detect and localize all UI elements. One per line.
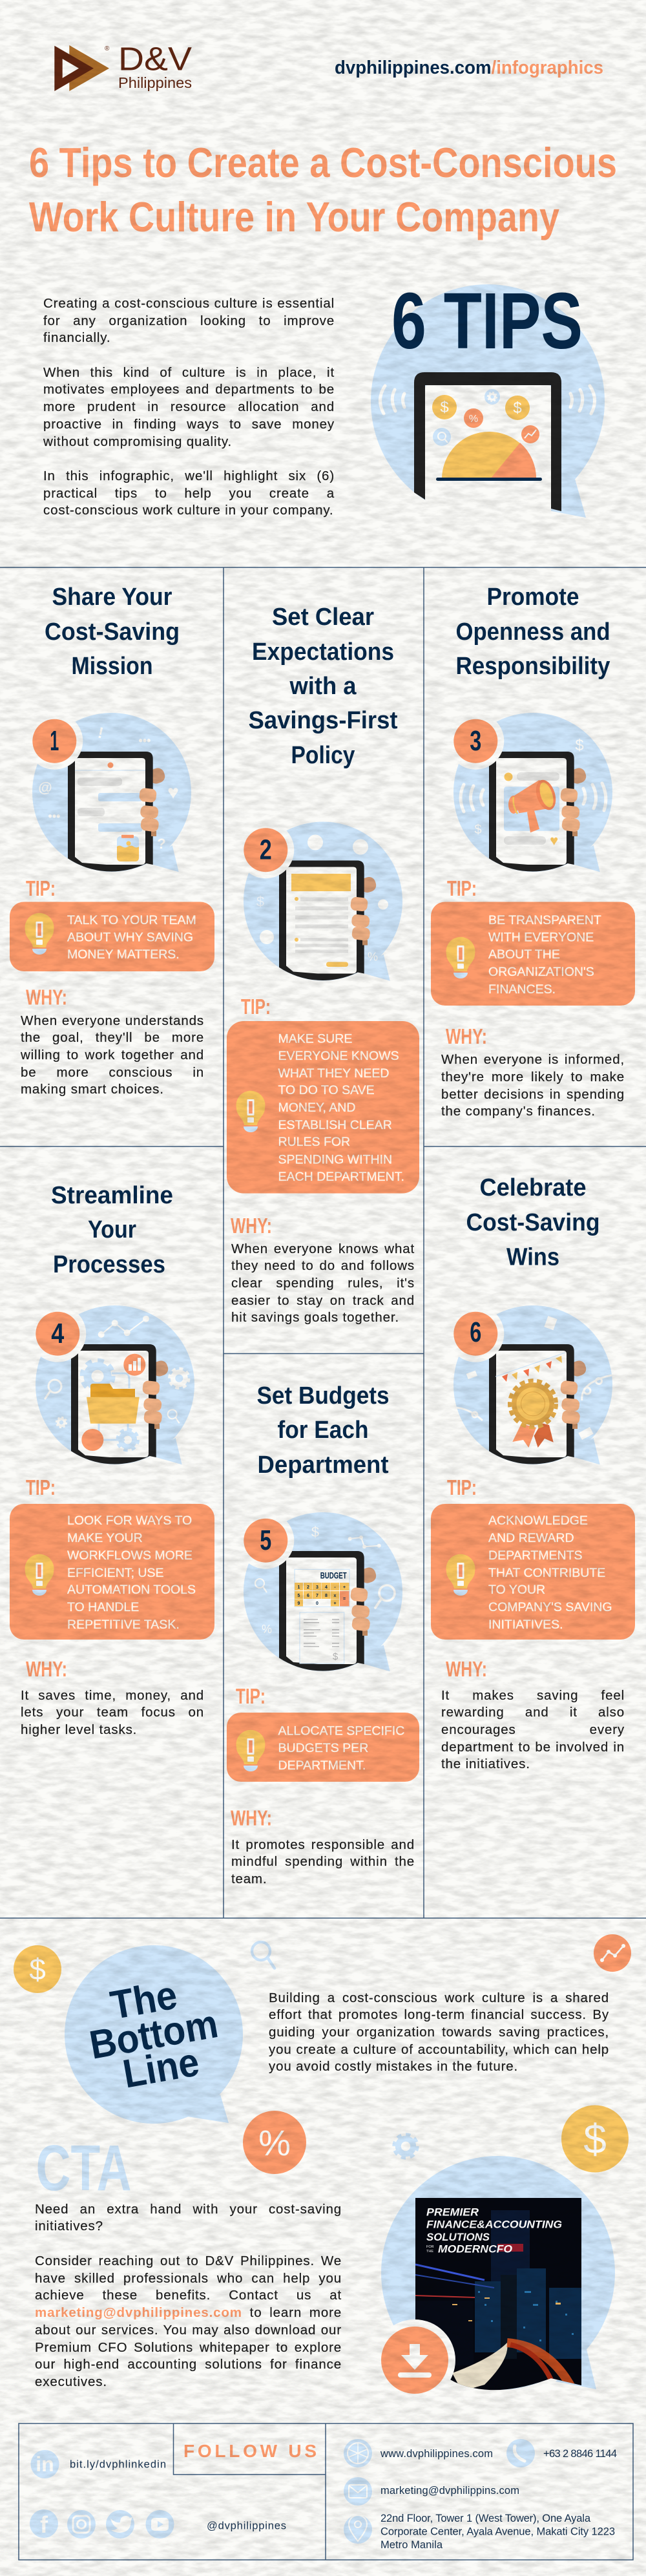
intro text: proactive in finding ways to save money — [43, 417, 335, 432]
tip box: EACH DEPARTMENT. — [278, 1170, 404, 1184]
linkedin link: in — [36, 2453, 54, 2476]
icon: percent coin — [243, 2111, 306, 2174]
tip box: ESTABLISH CLEAR — [278, 1118, 392, 1132]
whitepaper cover: FOR — [426, 2245, 434, 2249]
heading — [248, 604, 398, 769]
CTA text: have skilled professionals who can help you — [35, 2271, 342, 2286]
heading: 6 TIPS: 6 TIPS — [391, 277, 583, 366]
panel: the bottom line — [14, 1934, 631, 2124]
illustration: whitepaper in bubble — [374, 2156, 615, 2401]
illustration: budget calculator tablet: - — [334, 1585, 336, 1590]
tip box: SPENDING WITHIN — [278, 1153, 392, 1167]
CTA text: about our services. You may also download our — [35, 2323, 342, 2338]
icon: chart coin — [521, 425, 539, 443]
tip box: DEPARTMENT. — [278, 1758, 366, 1773]
why text: team. — [231, 1872, 267, 1886]
panel: tip 5 — [227, 1382, 425, 1891]
label: WHY: WHY: — [26, 985, 67, 1009]
icon: dollar coin — [561, 2106, 629, 2173]
heading: Openness and — [456, 618, 610, 646]
icon: yellow dollar coin: $ — [440, 399, 449, 416]
why text: It saves time, money, and — [21, 1688, 204, 1703]
tip box — [10, 902, 214, 971]
tip box: ABOUT THE — [488, 947, 560, 962]
why text: mindful spending within the — [231, 1854, 415, 1869]
illustration: policy document tablet: $ — [256, 893, 264, 910]
why text — [441, 1051, 635, 1123]
bottom line text: Building a cost-conscious work culture is a shared — [269, 1990, 609, 2005]
intro text: for any organization looking to improve — [43, 313, 335, 328]
label: WHY: WHY: — [446, 1657, 487, 1681]
heading — [51, 1182, 173, 1278]
tip box: ACKNOWLEDGE — [488, 1514, 588, 1528]
panel: footer — [19, 2423, 633, 2560]
social icons — [30, 2509, 174, 2539]
icon: dollar coin — [14, 1945, 61, 1993]
intro text: cost-conscious work culture in your company. — [43, 503, 333, 518]
why text: be more conscious in — [21, 1065, 204, 1080]
heading: Savings-First — [248, 707, 398, 734]
illustration: budget calculator tablet: 4 — [325, 1585, 328, 1590]
intro text: practical tips to help you create a — [43, 486, 335, 501]
why text: lets your team focus on — [21, 1705, 204, 1720]
heading: Department — [257, 1452, 389, 1479]
panel: tip 4 — [10, 1182, 214, 1742]
illustration: megaphone tablet: $ — [575, 737, 584, 754]
why text: rewarding and it also — [441, 1705, 625, 1720]
linkedin link: bit.ly/dvphlinkedin — [70, 2459, 166, 2471]
address contact: Metro Manila — [380, 2539, 443, 2551]
illustration: megaphone tablet — [447, 713, 612, 872]
why text: the initiatives. — [441, 1757, 530, 1771]
illustration: budget calculator tablet: + — [343, 1585, 346, 1590]
intro text: without compromising quality. — [43, 434, 232, 449]
label: TIP: TIP: — [26, 1475, 56, 1499]
heading: for Each — [278, 1417, 368, 1444]
intro text: financially. — [43, 330, 110, 345]
why text: department to be involved in — [441, 1740, 625, 1755]
tip box: MAKE SURE — [278, 1031, 352, 1046]
gauge — [436, 432, 542, 481]
why text — [231, 1837, 425, 1891]
heading: Celebrate — [479, 1174, 587, 1201]
tip box — [431, 902, 635, 1006]
heading: CTA: CTA — [36, 2132, 132, 2204]
logo: D&V Philippines: D&V — [118, 40, 192, 77]
illustration: budget calculator tablet: 5 — [260, 1525, 271, 1556]
whitepaper cover: THE — [426, 2250, 433, 2254]
why text — [21, 1687, 214, 1742]
website link: dvphilippines.com/infographics — [335, 58, 603, 78]
social icons: f — [40, 2511, 48, 2538]
tip box: RULES FOR — [278, 1135, 350, 1149]
heading: Promote — [487, 584, 579, 611]
why text: When everyone is informed, — [441, 1052, 625, 1067]
heading: Policy — [291, 742, 355, 769]
intro text: When this kind of culture is in place, it — [43, 365, 335, 380]
intro text: more prudent in resource allocation and — [43, 399, 335, 414]
bottom line text: effort that promotes long-term financial success. By — [269, 2007, 609, 2022]
intro text — [43, 295, 347, 528]
why text: easier to stay on track and — [231, 1293, 415, 1308]
icon: gear — [394, 2135, 417, 2158]
tip box: EFFICIENT; USE — [67, 1566, 164, 1580]
illustration: budget calculator tablet: 5 — [298, 1594, 300, 1598]
panel: tip 6 — [431, 1174, 635, 1775]
social handle: @dvphilippines — [207, 2520, 286, 2532]
tip box: EVERYONE KNOWS — [278, 1049, 399, 1063]
illustration: chat tablet: ••• — [48, 810, 60, 823]
illustration: workflow folder tablet — [29, 1305, 194, 1464]
label: WHY: WHY: — [231, 1214, 272, 1238]
icon: percent coin: % — [258, 2122, 291, 2163]
tip box: BE TRANSPARENT — [488, 913, 601, 927]
tip box: MONEY MATTERS. — [67, 947, 180, 962]
address contact — [344, 2513, 615, 2551]
email contact — [344, 2477, 519, 2506]
icon: download button — [374, 2319, 455, 2401]
illustration: budget calculator tablet: 9 — [298, 1601, 300, 1606]
tip box: WORKFLOWS MORE — [67, 1548, 193, 1563]
why text — [441, 1687, 635, 1775]
panel: tip 3 — [431, 584, 635, 1123]
heading: follow us: FOLLOW US — [183, 2441, 317, 2461]
illustration: chat tablet — [26, 713, 191, 872]
logo: D&V Philippines — [54, 40, 192, 91]
whitepaper cover: FINANCE&ACCOUNTING — [426, 2219, 562, 2231]
illustration: megaphone tablet: ♥ — [550, 832, 558, 849]
illustration: policy document tablet: 2 — [260, 834, 272, 866]
linkedin link — [31, 2450, 166, 2478]
logo: D&V Philippines: ® — [105, 45, 110, 52]
heading — [466, 1174, 599, 1271]
illustration: budget calculator tablet: 1 — [298, 1585, 300, 1590]
why text: the goal, they'll be more — [21, 1030, 204, 1045]
label: WHY: WHY: — [231, 1806, 272, 1830]
icon: yellow dollar coin right: $ — [513, 399, 522, 417]
illustration: chat tablet: ••• — [139, 734, 151, 747]
tip box: THAT CONTRIBUTE — [488, 1566, 605, 1580]
illustration: budget calculator tablet: = — [343, 1597, 346, 1601]
label: TIP: TIP: — [447, 1475, 477, 1499]
icon: dollar coin: $ — [29, 1952, 46, 1986]
tip box: ABOUT WHY SAVING — [67, 931, 193, 945]
website contact: www.dvphilippines.com — [380, 2448, 493, 2460]
why text — [21, 1013, 214, 1101]
heading: Wins — [506, 1243, 559, 1271]
bottom line text: you create a culture of accountability, which can help — [269, 2042, 609, 2057]
icon: percent coin — [464, 408, 483, 428]
whitepaper cover — [415, 2198, 581, 2392]
tip box: REPETITIVE TASK. — [67, 1618, 180, 1632]
illustration: budget calculator tablet: % — [262, 1623, 272, 1636]
tip box: ORGANIZATION'S — [488, 965, 594, 979]
illustration: budget calculator tablet: $ — [311, 1524, 319, 1540]
illustration: megaphone tablet: 3 — [470, 725, 481, 757]
why text: making smart choices. — [21, 1082, 164, 1097]
bubble: the bottom line heading: Line — [120, 2040, 202, 2097]
illustration: chat tablet: ♥ — [167, 782, 179, 803]
illustration: workflow folder tablet: 4 — [51, 1318, 65, 1349]
panel: tip 2 — [227, 604, 425, 1329]
why text: willing to work together and — [21, 1048, 204, 1062]
icon: yellow dollar coin right — [505, 396, 530, 420]
heading: Mission — [71, 653, 152, 680]
CTA text: achieve these benefits. Contact us at — [35, 2288, 342, 2303]
tip box: TALK TO YOUR TEAM — [67, 913, 196, 927]
tip box — [227, 1021, 419, 1193]
illustration: chat tablet: ! — [96, 724, 105, 743]
heading: Streamline — [51, 1182, 173, 1209]
illustration: budget calculator tablet: 0 — [316, 1601, 318, 1606]
why text: clear spending rules, it's — [231, 1276, 415, 1291]
phone contact — [506, 2439, 617, 2467]
heading: Your — [88, 1216, 136, 1243]
illustration: budget calculator tablet: $ — [333, 1651, 339, 1662]
why text — [231, 1241, 425, 1329]
CTA text: Consider reaching out to D&V Philippines. We — [35, 2254, 342, 2268]
why text: It makes saving feel — [441, 1688, 625, 1703]
illustration: chat tablet: 1 — [50, 725, 59, 757]
whitepaper cover: MODERNCFO — [438, 2244, 512, 2255]
heading: Responsibility — [456, 653, 610, 680]
icon: blue gear — [484, 389, 500, 405]
address contact: 22nd Floor, Tower 1 (West Tower), One Ayala — [380, 2513, 591, 2524]
illustration: budget calculator tablet: + — [333, 1601, 337, 1606]
bottom line text — [269, 1990, 618, 2080]
heading: Set Budgets — [257, 1382, 389, 1409]
tip box: BUDGETS PER — [278, 1741, 368, 1755]
tip box: MAKE YOUR — [67, 1531, 143, 1545]
intro text: In this infographic, we'll highlight six (6) — [43, 469, 335, 483]
why text: better decisions in spending — [441, 1087, 625, 1102]
icon: percent coin: % — [469, 414, 478, 425]
CTA text: Premium CFO Solutions whitepaper to explore — [35, 2339, 342, 2355]
tip box — [431, 1504, 635, 1640]
illustration: award ribbon tablet: 6 — [470, 1316, 481, 1348]
bubble: the bottom line heading: Bottom — [87, 2001, 222, 2068]
whitepaper cover: PREMIER — [426, 2207, 479, 2219]
tip box: FINANCES. — [488, 982, 556, 997]
heading: Cost-Saving — [45, 618, 180, 646]
bubble: the bottom line heading: The — [107, 1972, 180, 2028]
illustration: policy document tablet — [237, 821, 402, 981]
tip box: WITH EVERYONE — [488, 931, 594, 945]
CTA text: our high-end accounting solutions for finance — [35, 2357, 342, 2372]
label: TIP: TIP: — [26, 876, 56, 900]
tip box: AND REWARD — [488, 1531, 574, 1545]
label: TIP: TIP: — [447, 876, 477, 900]
website contact — [344, 2439, 493, 2467]
tip box: COMPANY'S SAVING — [488, 1600, 612, 1614]
logo: D&V Philippines: Philippines — [118, 74, 192, 91]
why text: higher level tasks. — [21, 1722, 137, 1737]
tip box: TO HANDLE — [67, 1600, 139, 1614]
illustration: budget calculator tablet: BUDGET — [320, 1570, 347, 1581]
tip box: DEPARTMENTS — [488, 1548, 583, 1563]
illustration: award ribbon tablet — [447, 1305, 612, 1464]
tip box: MONEY, AND — [278, 1101, 355, 1115]
title — [29, 139, 617, 240]
icon: magnifier — [252, 1942, 275, 1969]
heading: Share Your — [52, 584, 172, 611]
email contact: marketing@dvphilippins.com — [380, 2485, 519, 2497]
tip box: TO DO TO SAVE — [278, 1083, 375, 1097]
heading: Expectations — [252, 639, 394, 666]
why text: encourages every — [441, 1722, 625, 1737]
tip box: ALLOCATE SPECIFIC — [278, 1724, 404, 1738]
CTA text: initiatives? — [35, 2219, 103, 2233]
illustration: chat tablet: @ — [38, 779, 52, 796]
tip box: WHAT THEY NEED — [278, 1066, 389, 1081]
panel: tip 1 — [10, 584, 214, 1101]
tip box: LOOK FOR WAYS TO — [67, 1514, 192, 1528]
icon: dollar coin: $ — [583, 2116, 607, 2162]
icon: chart coin — [594, 1934, 631, 1972]
CTA text: marketing@dvphilippines.com to learn more — [35, 2305, 342, 2320]
address contact: Corporate Center, Ayala Avenue, Makati City 1223 — [380, 2526, 615, 2537]
why text: hit savings goals together. — [231, 1310, 399, 1325]
illustration: megaphone tablet: $ — [474, 823, 482, 837]
why text: they're more likely to make — [441, 1070, 625, 1084]
intro text: Creating a cost-conscious culture is essential — [43, 296, 335, 311]
icon: yellow dollar coin — [432, 395, 457, 419]
heading — [257, 1382, 389, 1479]
hero illustration: 6 tips bubble with gauge tablet — [371, 277, 605, 520]
tip box: TO YOUR — [488, 1583, 545, 1597]
bottom line text: guiding your organization towards saving practices, — [269, 2025, 609, 2040]
illustration: budget calculator tablet: x — [334, 1594, 337, 1598]
tip box — [227, 1713, 419, 1782]
heading: Set Clear — [272, 604, 374, 631]
why text: When everyone knows what — [231, 1241, 415, 1256]
why text: they need to do and follows — [231, 1258, 415, 1273]
tip box: INITIATIVES. — [488, 1618, 563, 1632]
CTA text: Need an extra hand with your cost-saving — [35, 2202, 342, 2217]
illustration: budget calculator tablet: 2 — [307, 1585, 309, 1590]
phone contact: +63 2 8846 1144 — [543, 2448, 617, 2460]
bubble: the bottom line heading — [65, 1945, 243, 2124]
illustration: budget calculator tablet: 7 — [316, 1594, 318, 1598]
label: TIP: TIP: — [236, 1684, 266, 1708]
why text: It promotes responsible and — [231, 1837, 415, 1852]
bottom line text: you avoid costly mistakes in the future. — [269, 2059, 518, 2074]
illustration: policy document tablet: % — [368, 950, 378, 963]
tip box: AUTOMATION TOOLS — [67, 1583, 196, 1597]
illustration: budget calculator tablet: 8 — [325, 1594, 328, 1598]
CTA text — [35, 2201, 351, 2395]
illustration: budget calculator tablet: 6 — [307, 1594, 309, 1598]
heading: with a — [289, 673, 357, 700]
title: Work Culture in Your Company — [29, 193, 559, 240]
heading: Processes — [53, 1251, 165, 1278]
CTA text: executives. — [35, 2374, 107, 2389]
heading — [45, 584, 180, 680]
illustration: budget calculator tablet — [237, 1512, 402, 1671]
whitepaper cover: SOLUTIONS — [426, 2232, 490, 2243]
intro text: motivates employees and departments to be — [43, 382, 335, 397]
illustration: budget calculator tablet: 3 — [316, 1585, 318, 1590]
why text: When everyone understands — [21, 1013, 204, 1028]
tip box — [10, 1504, 214, 1640]
panel: call to action — [35, 2106, 629, 2401]
illustration: chat tablet: ? — [157, 836, 166, 852]
label: WHY: WHY: — [446, 1024, 487, 1048]
heading: Cost-Saving — [466, 1209, 599, 1236]
icon: magnifier — [433, 428, 451, 446]
label: WHY: WHY: — [26, 1657, 67, 1681]
heading — [456, 584, 610, 680]
label: TIP: TIP: — [241, 995, 271, 1019]
why text: the company's finances. — [441, 1104, 596, 1119]
